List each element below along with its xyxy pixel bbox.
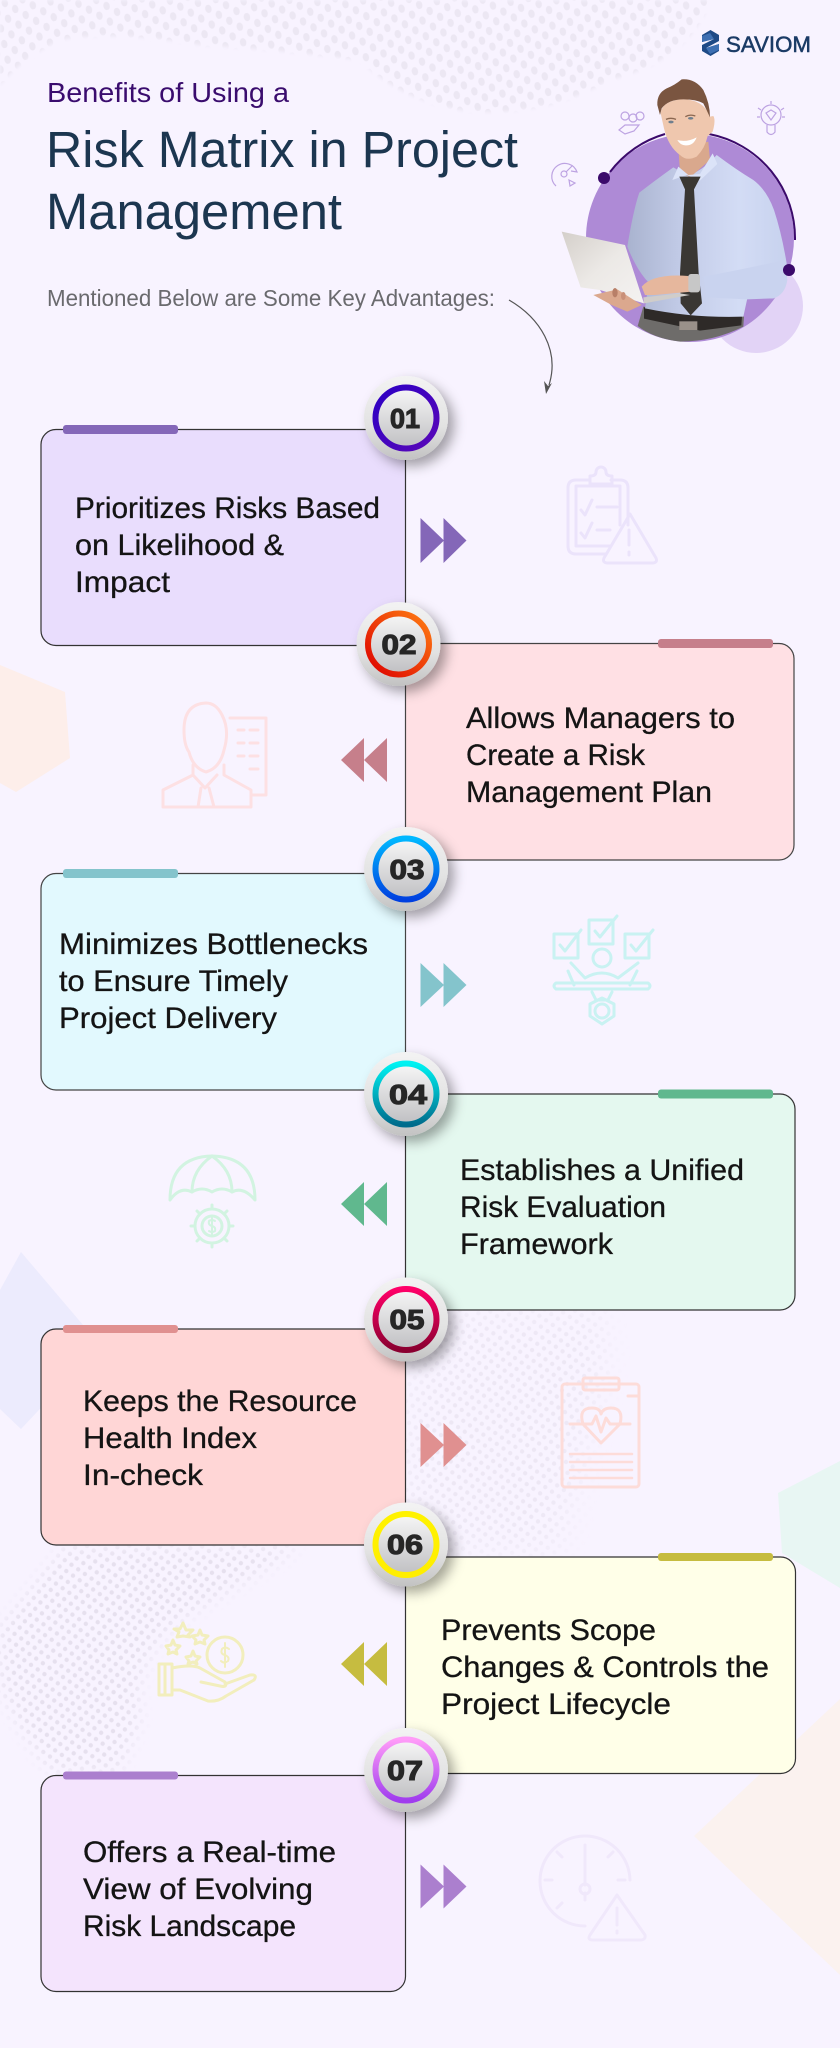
logo mark: [702, 30, 719, 56]
card 01 text: Impact: [75, 566, 170, 599]
badge 02: [356, 602, 440, 686]
title: Risk Matrix in Project: [46, 121, 518, 178]
arrow 05: [420, 1423, 466, 1467]
card 05 text: Health Index: [83, 1422, 257, 1455]
card 04 background: [406, 1094, 795, 1310]
card 05 background: [41, 1329, 406, 1545]
subtitle: Benefits of Using a: [47, 77, 289, 108]
icon: clipboard with warning: [568, 467, 656, 563]
card 07 text: View of Evolving: [83, 1873, 313, 1906]
icon: hand with coin and stars: [159, 1623, 255, 1701]
card 05 text: Keeps the Resource: [83, 1385, 357, 1418]
badge 01: [364, 376, 448, 460]
badge 01: 01: [390, 403, 420, 434]
panel 06: [406, 1553, 796, 1774]
icon: umbrella protecting money: [170, 1156, 255, 1247]
icon: health report: [562, 1378, 639, 1487]
card 04 text: [460, 1154, 744, 1261]
card 03 text: Minimizes Bottlenecks: [59, 928, 368, 961]
badge 06: 06: [387, 1529, 423, 1560]
card 03 accent bar: [63, 869, 178, 878]
card 07 text: Risk Landscape: [83, 1910, 296, 1943]
card 02 accent bar: [658, 639, 773, 648]
card 06 background: [406, 1557, 796, 1774]
badge 05: [364, 1278, 448, 1362]
card 02 text: Create a Risk: [466, 739, 645, 772]
badge 06: [364, 1502, 448, 1586]
card 01 accent bar: [63, 425, 178, 434]
title: [46, 121, 518, 240]
panel 07: [41, 1772, 406, 1992]
man: [562, 79, 787, 342]
hero illustration: man with laptop: [552, 79, 803, 353]
card 06 text: Project Lifecycle: [441, 1688, 671, 1721]
card 01 text: Prioritizes Risks Based: [75, 492, 380, 525]
card 01 text: [75, 492, 380, 599]
arrow 03: [420, 963, 466, 1007]
card 03 background: [41, 874, 406, 1090]
card 04 text: Establishes a Unified: [460, 1154, 744, 1187]
card 06 text: Prevents Scope: [441, 1614, 656, 1647]
card 07 background: [41, 1776, 406, 1992]
card 02 text: [466, 702, 735, 809]
card 03 text: [59, 928, 368, 1035]
arrow 04: [341, 1182, 387, 1226]
card 06 accent bar: [658, 1553, 773, 1561]
card 05 text: In-check: [83, 1459, 203, 1492]
arrow 06: [341, 1642, 387, 1686]
badge 07: [364, 1728, 448, 1812]
panel 03: [41, 869, 406, 1090]
card 06 text: Changes & Controls the: [441, 1651, 769, 1684]
card 02 text: Allows Managers to: [466, 702, 735, 735]
purple circle backdrop: [709, 259, 803, 353]
badge 04: 04: [389, 1079, 428, 1110]
card 04 text: Risk Evaluation: [460, 1191, 666, 1224]
intro text: Mentioned Below are Some Key Advantages:: [47, 285, 495, 311]
card 07 text: Offers a Real-time: [83, 1836, 336, 1869]
logo wordmark: SAVIOM: [726, 32, 811, 57]
panel 04: [406, 1090, 795, 1310]
logo: [702, 30, 811, 57]
badge 04: [364, 1052, 448, 1136]
floating line icons: [552, 101, 785, 186]
curved arrow: [509, 300, 552, 394]
badge 05: 05: [390, 1304, 424, 1335]
title: Management: [46, 183, 342, 240]
card 03 text: Project Delivery: [59, 1002, 277, 1035]
card 03 text: to Ensure Timely: [59, 965, 288, 998]
panel 01: [41, 425, 406, 646]
card 06 text: [441, 1614, 769, 1721]
card 07 accent bar: [63, 1772, 178, 1780]
card 02 text: Management Plan: [466, 776, 712, 809]
arrow 02: [341, 738, 387, 782]
card 01 text: on Likelihood &: [75, 529, 284, 562]
card 01 background: [41, 430, 406, 646]
card 04 text: Framework: [460, 1228, 613, 1261]
card 04 accent bar: [658, 1090, 773, 1098]
card 05 text: [83, 1385, 357, 1492]
badge 02: 02: [382, 629, 416, 660]
card 07 text: [83, 1836, 336, 1943]
panel 05: [41, 1325, 406, 1545]
arrow 07: [420, 1864, 466, 1908]
badge 07: 07: [387, 1755, 423, 1786]
icon: clock with warning: [540, 1836, 645, 1940]
badge 03: [364, 827, 448, 911]
arrow 01: [420, 518, 466, 563]
card 05 accent bar: [63, 1325, 178, 1333]
icon: person balancing tasks: [554, 916, 653, 1024]
badge 03: 03: [390, 854, 424, 885]
panel 02: [406, 639, 794, 860]
card 02 background: [406, 644, 794, 860]
icon: manager with document: [163, 703, 266, 807]
